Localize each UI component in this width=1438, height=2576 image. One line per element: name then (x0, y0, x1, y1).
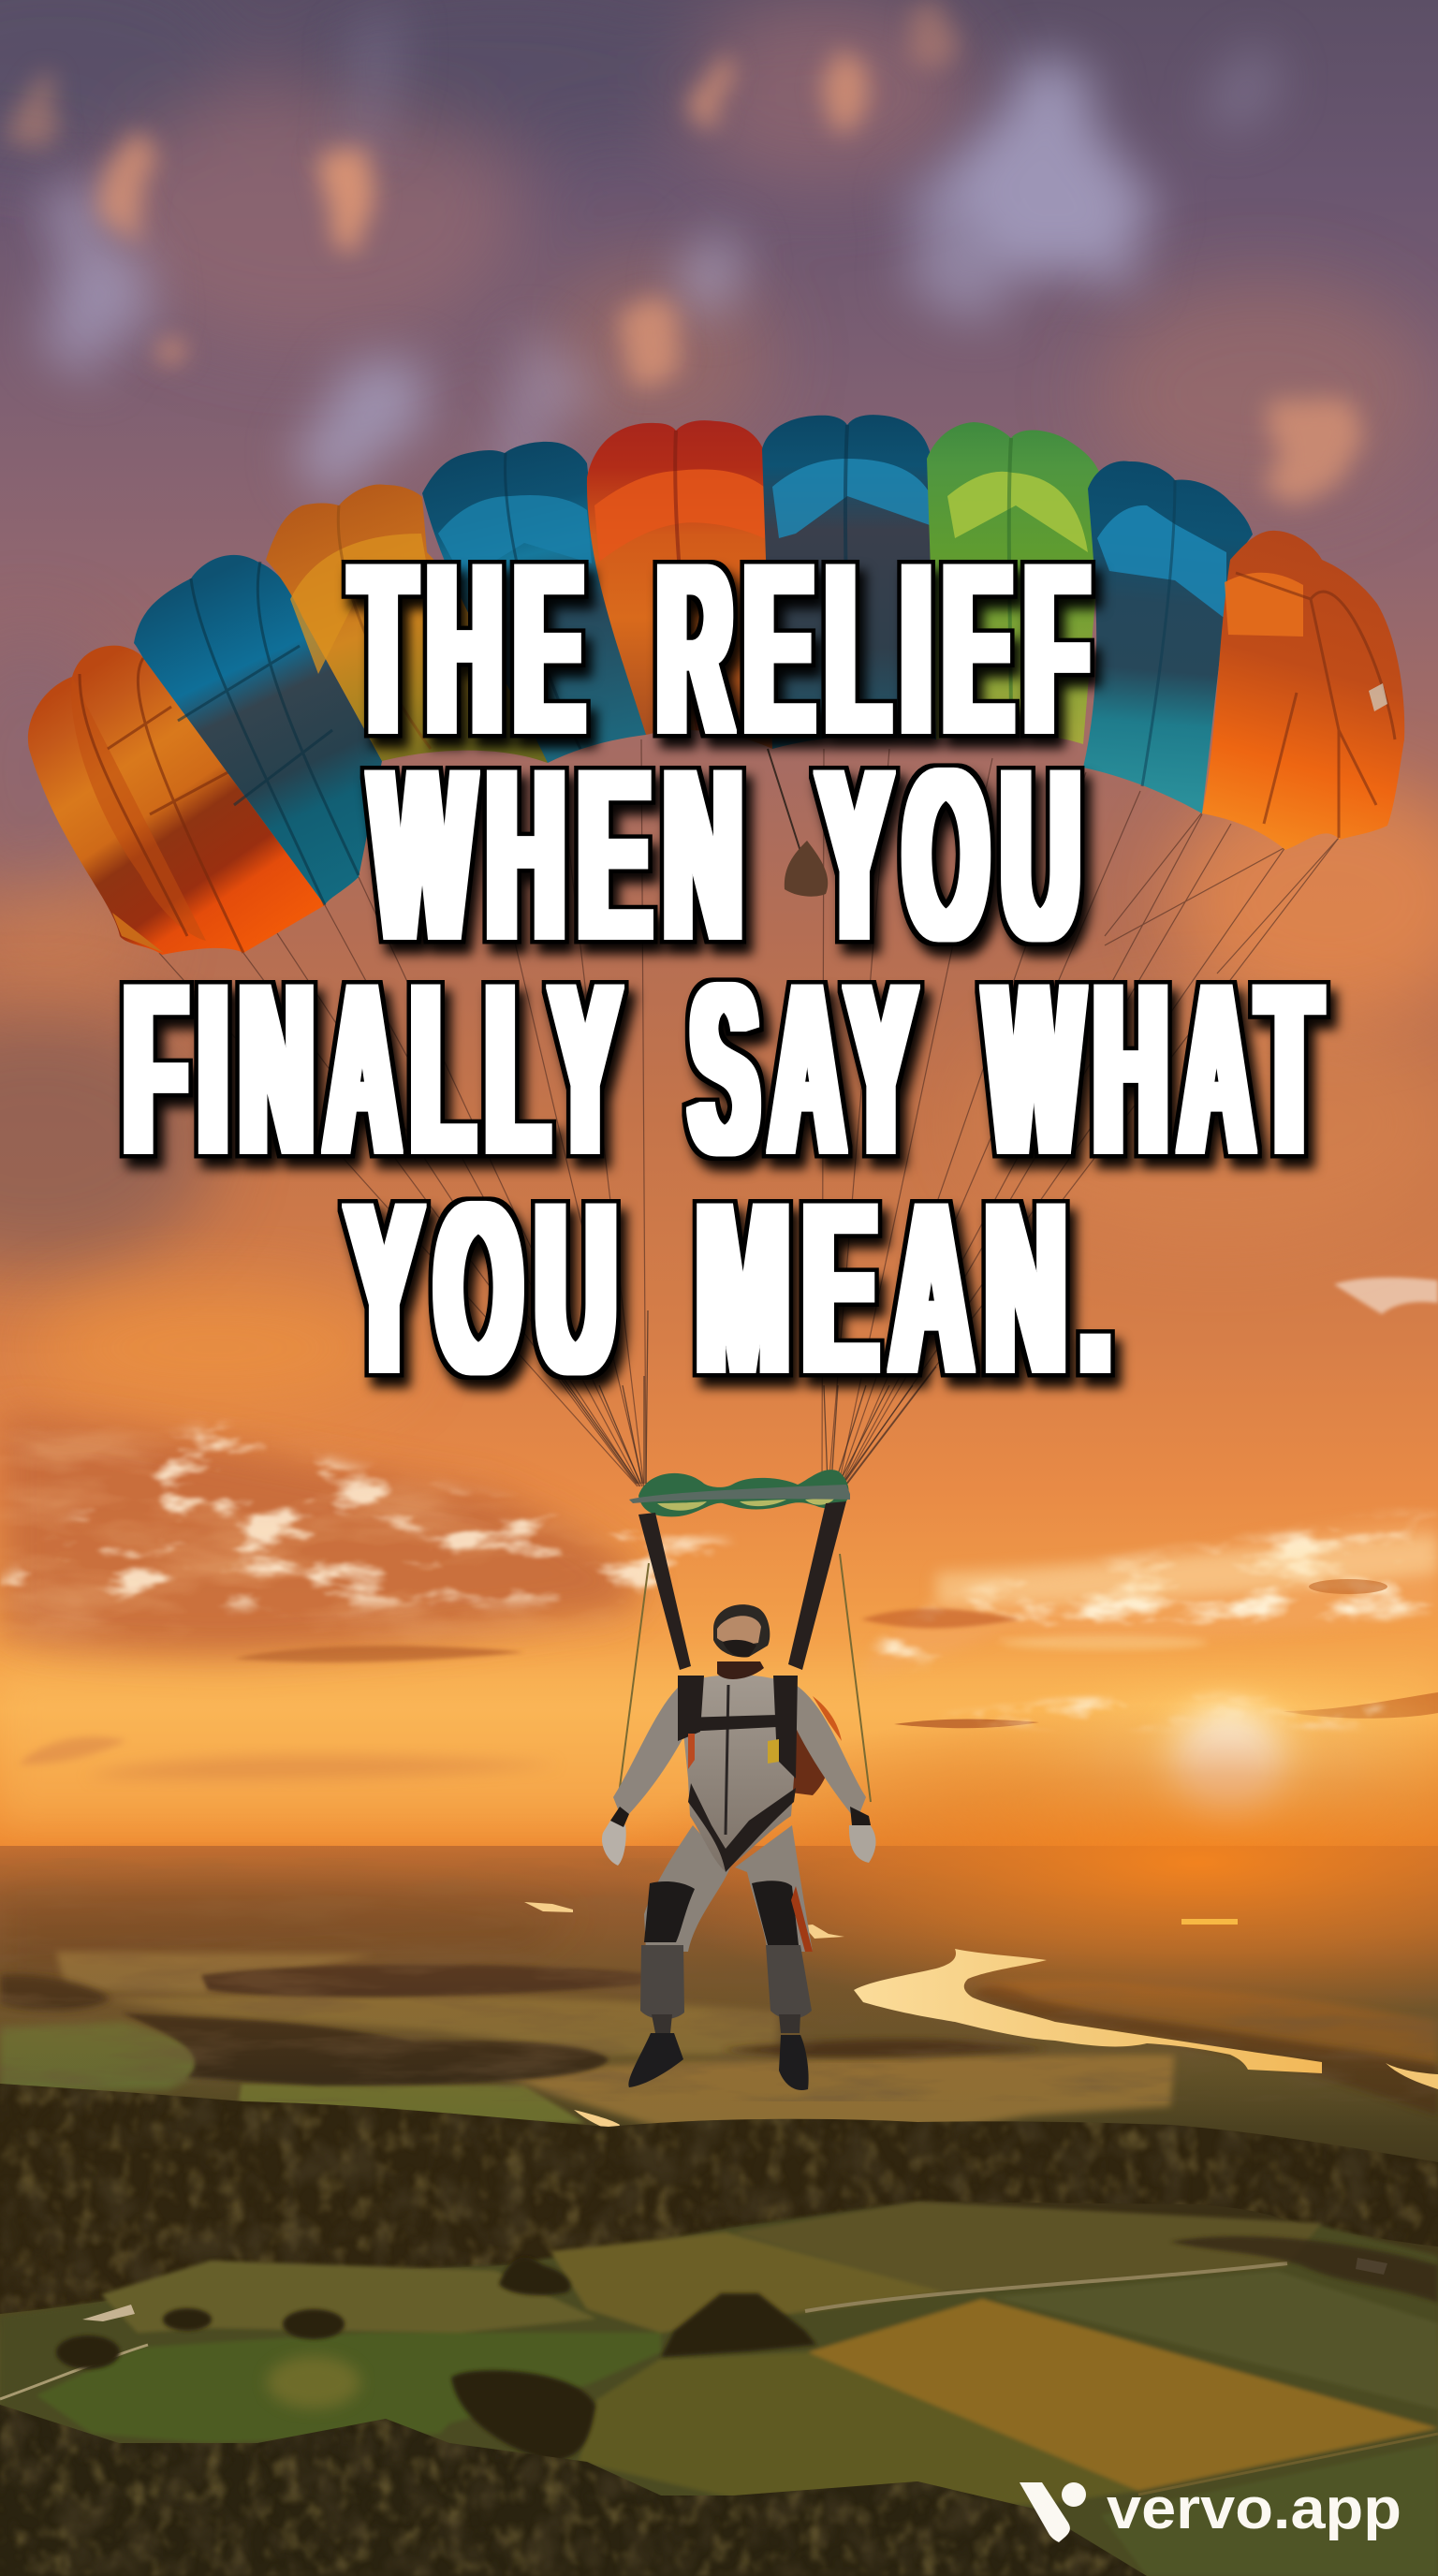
lilac cloud patches (37, 19, 1288, 491)
risers (638, 1501, 846, 1670)
canopy cell: blue (422, 442, 646, 763)
left cloud wisps (0, 1420, 732, 1615)
distant dark woodland (0, 1883, 580, 1975)
landscape (0, 1704, 1438, 2576)
sky with sunset clouds (0, 0, 1438, 1858)
canopy cell: orange right (1202, 531, 1404, 850)
canopy cell: teal (134, 555, 382, 905)
right arm (791, 1685, 866, 1821)
skydiver (602, 1604, 876, 2090)
farm fields (0, 2202, 1438, 2576)
warm haze patches (0, 0, 1432, 505)
slider bar (629, 1470, 850, 1516)
canopy cell: blue right (1083, 461, 1253, 813)
gloves (602, 1821, 626, 1866)
mid sky tone (1170, 777, 1438, 1020)
neck collar (717, 1661, 764, 1679)
houses and trees at right (1170, 2236, 1438, 2303)
dark tree strips (201, 1964, 646, 1997)
river (854, 1949, 1322, 2073)
logo wordmark: vervo.app (1107, 2477, 1401, 2541)
far right bank (978, 1981, 1438, 2069)
legs (644, 1825, 730, 1952)
suspension lines (159, 739, 1339, 1488)
orange horizon haze (0, 1846, 1438, 2127)
foreground forest (0, 2405, 1147, 2576)
left cloud bank (0, 1413, 641, 1659)
farm pond and house (82, 2305, 135, 2321)
forest band (0, 2084, 1438, 2314)
lines near risers (552, 1310, 936, 1484)
bright right cloud band (861, 1516, 1438, 1676)
tree clumps (56, 2258, 816, 2462)
field roads (805, 2263, 1287, 2311)
title (125, 513, 1333, 1423)
peach cloud glints (9, 0, 1359, 504)
canopy cell: orange (28, 646, 325, 955)
helmet and head (713, 1604, 770, 1657)
parachute canopy (28, 415, 1404, 955)
steering lines (618, 1554, 871, 1802)
pilot pouch (768, 749, 828, 897)
left arm (613, 1685, 693, 1821)
backpack (791, 1699, 829, 1795)
low cloud streaks (84, 1756, 562, 1780)
harness (678, 1676, 798, 1872)
canopy cell: green (927, 422, 1101, 744)
canopy cell: dark blue (762, 415, 936, 749)
shoes (628, 2033, 683, 2087)
canopy cell: red (587, 420, 773, 749)
canopy cell: amber (266, 484, 548, 763)
left meadows (56, 1952, 374, 1994)
torso (679, 1675, 798, 1870)
ponds (524, 1902, 1238, 2132)
sun glow (950, 1680, 1431, 1837)
logo mark (1020, 2482, 1086, 2542)
brand logo (1020, 2477, 1401, 2542)
